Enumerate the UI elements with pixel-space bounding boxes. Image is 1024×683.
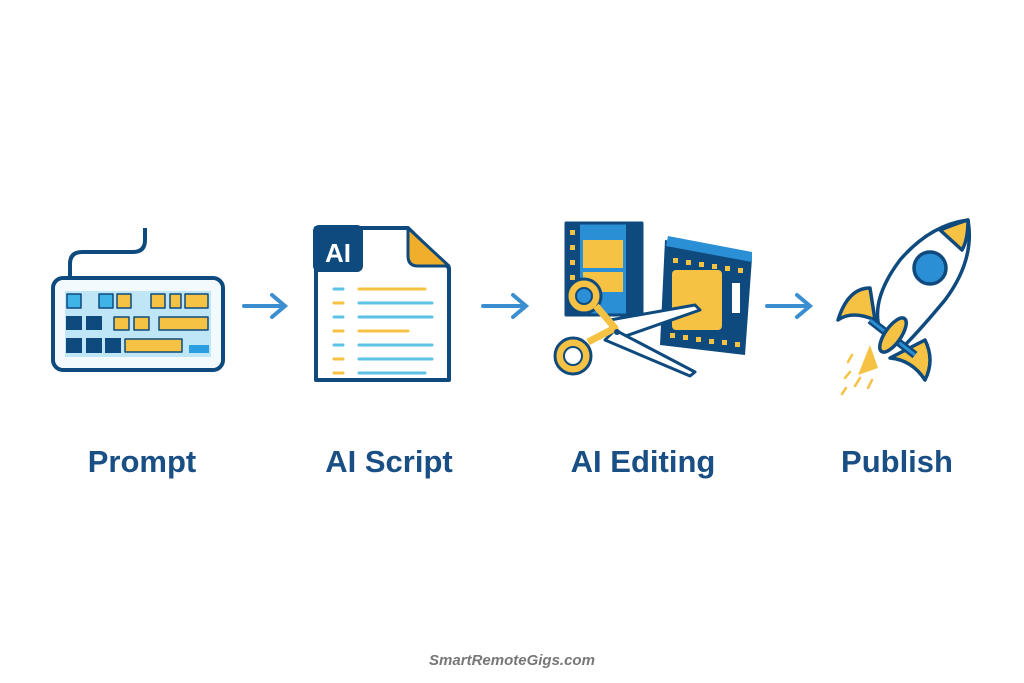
- icon: AI document: [313, 225, 449, 380]
- label: AI Script: AI Script: [325, 444, 453, 479]
- arrow 2: [483, 295, 526, 317]
- label: AI Editing: AI Editing: [571, 444, 715, 479]
- label: Publish: Publish: [841, 444, 953, 479]
- icon: rocket: [838, 220, 969, 394]
- arrow 3: [767, 295, 810, 317]
- icon: keyboard: [53, 228, 223, 370]
- footer watermark: SmartRemoteGigs.com: [429, 652, 595, 669]
- icon: film and scissors: [555, 223, 752, 376]
- label: Prompt: Prompt: [88, 444, 196, 479]
- arrow 1: [244, 295, 285, 317]
- icon: AI document: AI: [325, 238, 351, 268]
